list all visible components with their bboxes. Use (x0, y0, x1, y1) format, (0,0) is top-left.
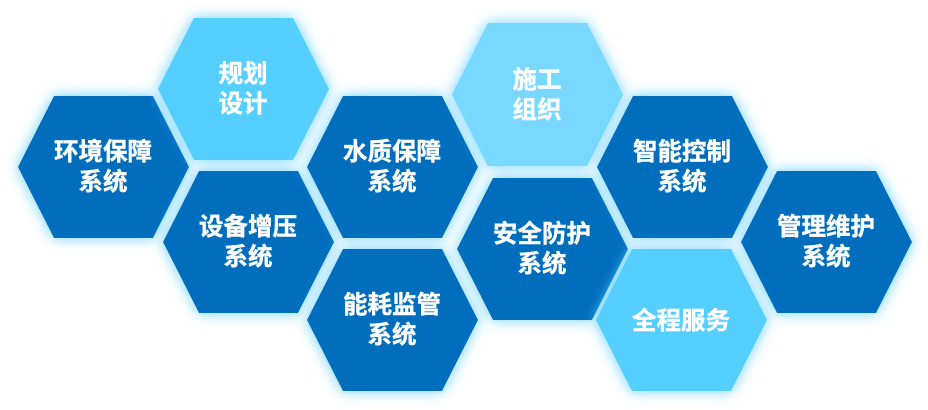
hexagon: 规划设计 (158, 18, 329, 160)
hexagon: 安全防护系统: 系统 (518, 250, 566, 278)
hexagon: 智能控制系统: 智能控制 (633, 138, 731, 166)
hexagon: 设备增压系统 (163, 171, 334, 313)
hexagon: 管理维护系统: 系统 (802, 243, 850, 271)
hexagon: 能耗监管系统: 系统 (368, 321, 416, 349)
hexagon: 智能控制系统: 系统 (658, 168, 706, 196)
hexagon: 能耗监管系统 (307, 249, 478, 391)
hexagon: 施工组织: 组织 (512, 96, 562, 124)
hexagon: 环境保障系统 (18, 96, 189, 238)
hexagon: 施工组织 (452, 23, 623, 166)
hexagon: 环境保障系统: 环境保障 (54, 138, 152, 166)
hexagon: 水质保障系统: 系统 (368, 168, 416, 196)
hexagon: 管理维护系统: 管理维护 (777, 213, 875, 241)
hexagon: 全程服务 (596, 249, 767, 391)
hexagon: 智能控制系统 (597, 96, 768, 238)
hexagon: 管理维护系统 (741, 171, 912, 313)
hexagon: 规划设计: 设计 (218, 90, 268, 118)
hexagon: 规划设计: 规划 (218, 60, 268, 88)
hexagon: 水质保障系统: 水质保障 (343, 138, 441, 166)
hexagon: 安全防护系统 (457, 178, 628, 320)
hexagon: 设备增压系统: 系统 (224, 243, 272, 271)
hexagon: 安全防护系统: 安全防护 (493, 220, 591, 248)
hexagon: 环境保障系统: 系统 (78, 168, 128, 196)
hexagon: 能耗监管系统: 能耗监管 (343, 291, 441, 319)
hexagon: 水质保障系统 (307, 96, 478, 238)
hexagon: 设备增压系统: 设备增压 (199, 213, 297, 241)
hexagon: 施工组织: 施工 (512, 66, 562, 94)
hexagon: 全程服务: 全程服务 (632, 307, 730, 335)
